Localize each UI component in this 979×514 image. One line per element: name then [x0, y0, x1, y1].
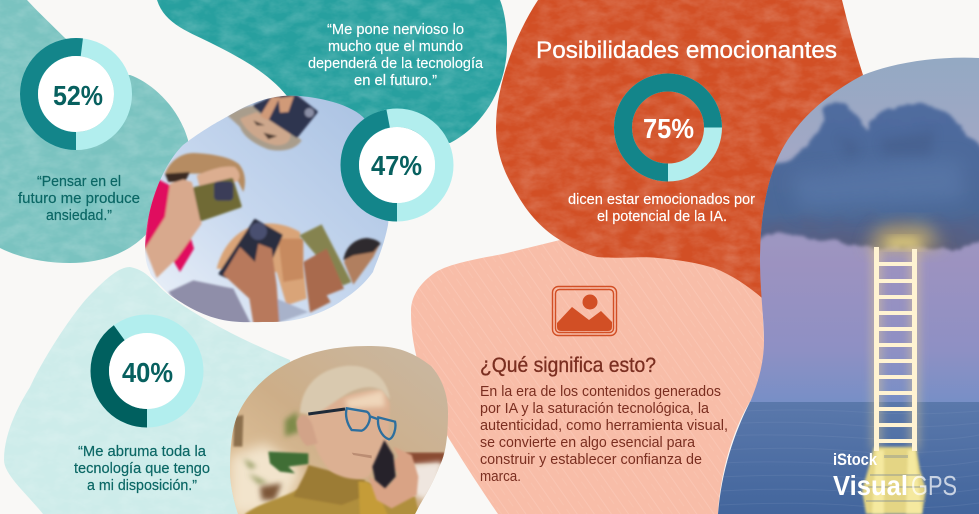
woman's head, glasses, phone and sweater — [245, 366, 420, 514]
heading: ¿Qué significa esto?: ¿Qué significa esto? — [480, 354, 656, 377]
panel: teal blob with quote 47% — [157, 0, 507, 143]
logo: iStock VisualGPS: Visual — [833, 470, 908, 501]
text: dicen estar emocionados: dicen estar emocionados por — [568, 191, 755, 208]
text: dicen estar emocionados — [568, 191, 755, 225]
text: explanation paragraph: autenticidad, como herramienta visual, — [480, 417, 728, 434]
donut: 52%: 52% — [53, 80, 103, 111]
donut: 75%: 75% — [643, 113, 694, 144]
text: dicen estar emocionados: el potencial de la IA. — [597, 208, 727, 225]
text: explanation paragraph: marca. — [480, 468, 521, 485]
text: explanation paragraph: En la era de los contenidos generados — [480, 383, 721, 400]
panel: peach blob ¿Qué significa esto? — [411, 220, 764, 514]
icon: image picture — [552, 286, 616, 336]
logo: iStock VisualGPS: GPS — [911, 470, 957, 501]
quote: Me abruma — [74, 443, 210, 494]
quote: Me pone nervioso: mucho que el mundo — [328, 38, 463, 55]
quote: Me pone nervioso: dependerá de la tecnología — [308, 55, 484, 72]
quote: Pensar en el futuro — [18, 173, 140, 224]
text: explanation paragraph: por IA y la saturación tecnológica, la — [480, 400, 710, 417]
panel: orange blob Posibilidades emocionantes — [496, 0, 863, 298]
photo: woman on the phone — [225, 340, 455, 514]
quote: Me pone nervioso — [308, 21, 484, 89]
quote: Pensar en el futuro: ansiedad.” — [46, 207, 112, 224]
quote: Me abruma: “Me abruma toda la — [78, 443, 207, 460]
quote: Pensar en el futuro: “Pensar en el — [37, 173, 121, 190]
donut: 47%: 47% — [371, 150, 422, 181]
right person with olive phone — [299, 224, 381, 313]
text: explanation paragraph — [480, 383, 728, 485]
logo: iStock VisualGPS: iStock — [833, 451, 878, 469]
ladder glow — [876, 247, 914, 450]
reflection of ladder — [862, 447, 926, 514]
quote: Pensar en el futuro: futuro me produce — [18, 190, 140, 207]
quote: Me pone nervioso: “Me pone nervioso lo — [327, 21, 464, 38]
panel: pale teal blob behind 40% — [4, 267, 300, 514]
logo: iStock VisualGPS — [833, 451, 957, 501]
donut: 40%: 40% — [122, 357, 173, 388]
ladder — [874, 247, 917, 451]
man at top with phone — [227, 95, 316, 151]
heading: Posibilidades emocionantes: Posibilidades emocionantes — [536, 37, 837, 64]
quote: Me abruma: tecnología que tengo — [74, 460, 210, 477]
cloud — [750, 104, 979, 250]
donut: 40% — [100, 324, 194, 418]
text: explanation paragraph: construir y establecer confianza de — [480, 451, 702, 468]
donut: 47% — [350, 118, 444, 212]
sea ripples — [720, 422, 979, 508]
donut: 52% — [29, 47, 123, 141]
background room: plant and shelf — [230, 412, 445, 514]
quote: Me abruma: a mi disposición.” — [87, 477, 197, 494]
donut: 75% — [623, 82, 713, 172]
centre person with dark phone — [168, 220, 308, 325]
photo: people looking at phones — [140, 90, 395, 325]
photo: glowing ladder to a storm cloud over the sea — [715, 55, 979, 514]
woman at left with olive phone — [144, 153, 245, 278]
text: explanation paragraph: se convierte en algo esencial para — [480, 434, 696, 451]
panel: light teal blob behind 52% — [0, 0, 190, 263]
quote: Me pone nervioso: en el futuro.” — [354, 72, 437, 89]
